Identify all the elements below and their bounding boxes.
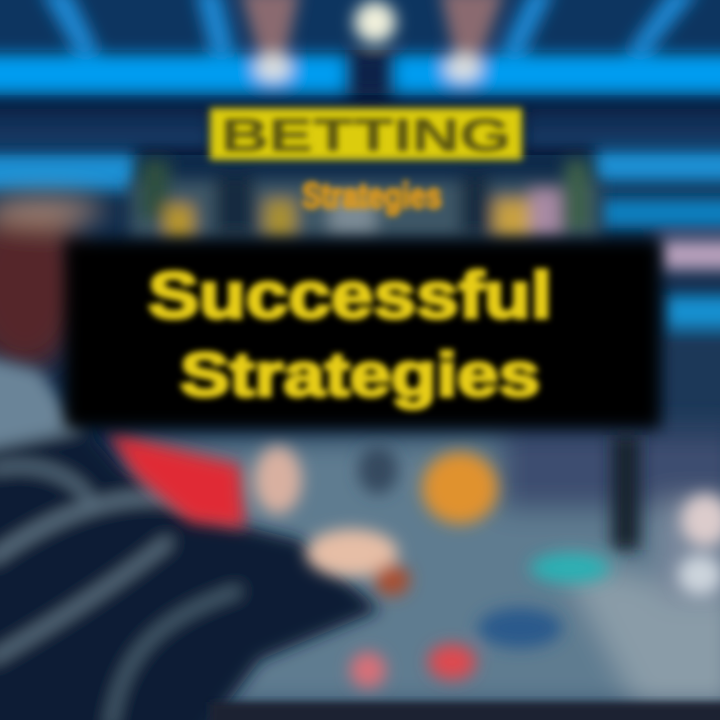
black title panel [65,240,660,428]
main title: Strategies [180,341,540,410]
table surface [120,430,720,710]
crowd strip [130,160,600,240]
side blue bands [0,150,720,435]
top heading: yellow badge: BETTING [221,109,511,161]
main title [148,258,552,410]
jacket foreground [0,355,380,720]
top heading: yellow badge [210,108,522,161]
poker chips and cards on table [108,432,720,688]
left spectator shoulder [0,197,105,370]
ceiling beams and lights [0,0,720,143]
bottom dark edge [210,702,720,720]
main title: Successful [148,258,552,332]
small orange subheading: Strategies [302,175,442,216]
